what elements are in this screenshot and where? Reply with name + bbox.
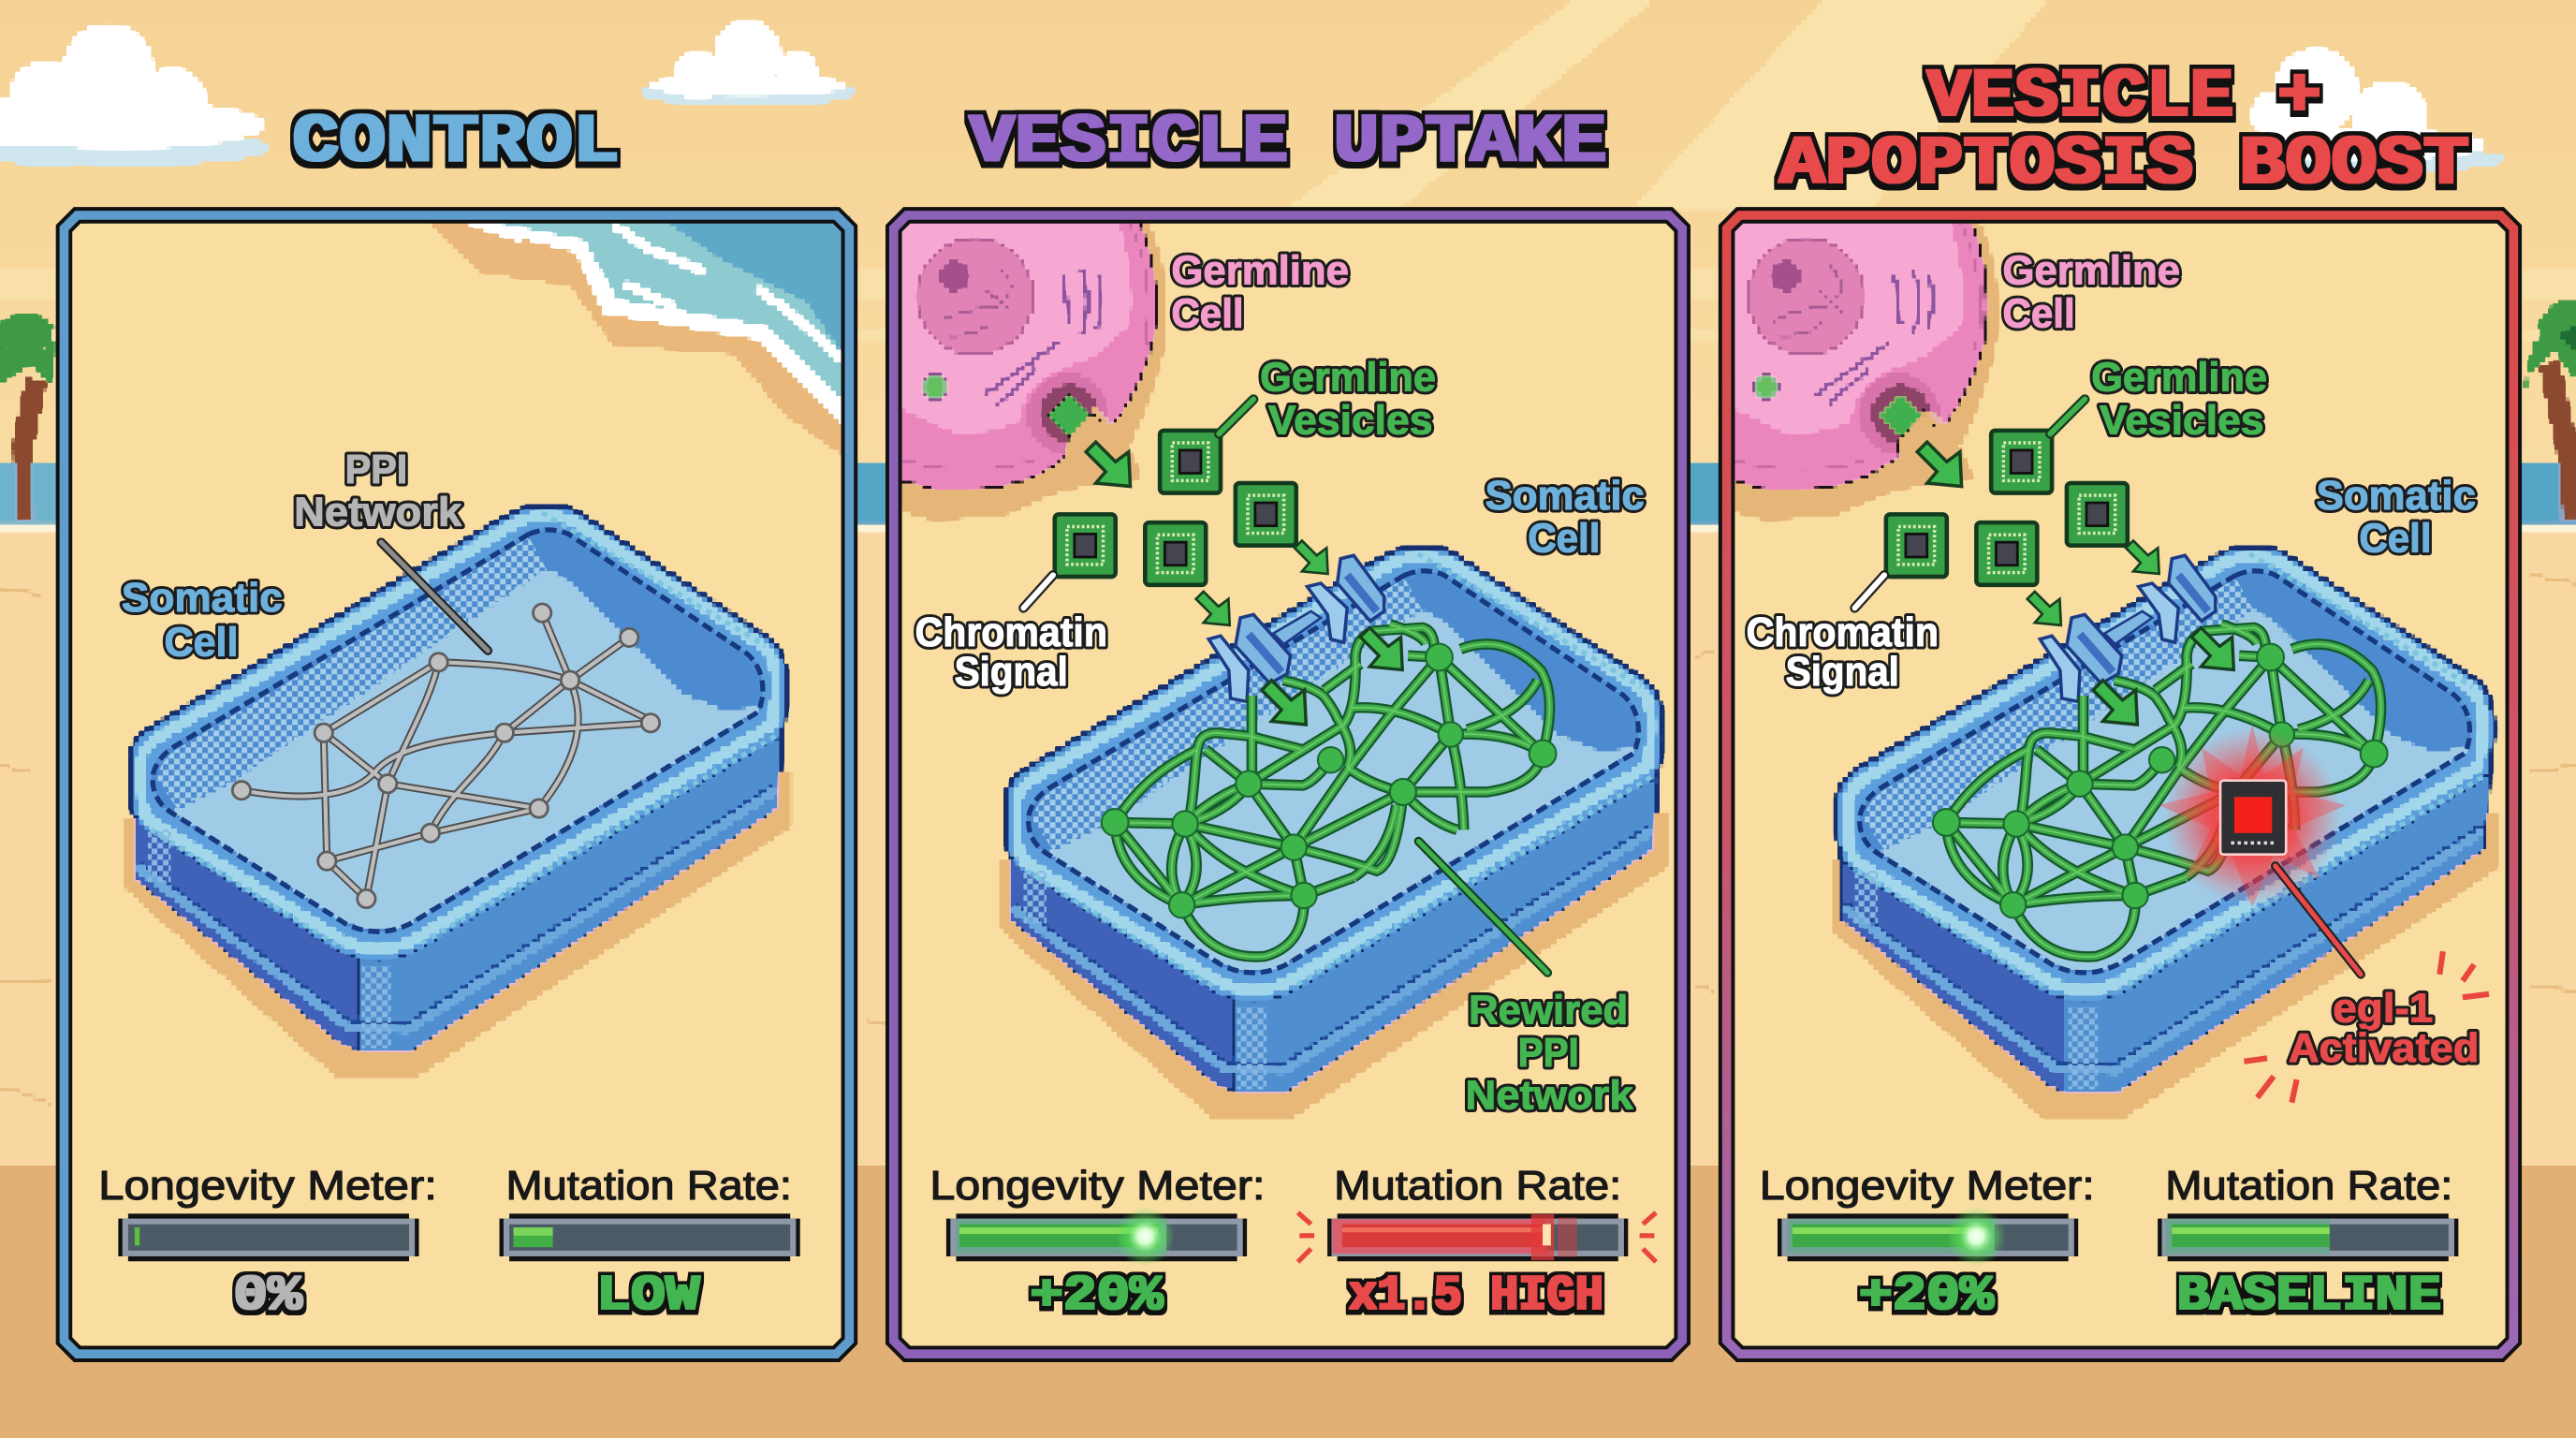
leader line: germline vesicles xyxy=(1219,400,1253,433)
mutation rate meter: Mutation Rate: xyxy=(2165,1163,2452,1209)
label: rewired ppi network: Rewired xyxy=(1469,987,1628,1033)
label: somatic cell: Somatic xyxy=(122,575,283,621)
label: germline cell xyxy=(2002,248,2180,336)
germline cell xyxy=(900,218,1165,520)
panel border xyxy=(894,215,1682,1354)
mutation rate meter xyxy=(1298,1163,1656,1324)
germline cell xyxy=(1732,218,1997,520)
ocean wave corner xyxy=(429,218,848,457)
mutation rate meter xyxy=(2158,1163,2458,1324)
label: germline vesicles xyxy=(2091,355,2267,443)
leader line: rewired network xyxy=(1419,842,1547,973)
label: rewired ppi network: PPI xyxy=(1518,1030,1579,1076)
title: vesicle uptake: VESICLE UPTAKE xyxy=(970,105,1606,183)
panel: vesicle uptake xyxy=(894,215,1682,1354)
label: germline cell xyxy=(1171,248,1349,336)
mutation rate meter: LOW xyxy=(596,1268,700,1324)
label: germline vesicles: Germline xyxy=(1260,355,1436,401)
label: somatic cell xyxy=(122,575,283,665)
label: germline cell: Germline xyxy=(1171,248,1349,294)
panel border xyxy=(64,215,849,1354)
germline vesicle chips xyxy=(1886,431,2128,585)
somatic cell tray xyxy=(126,506,790,1078)
somatic cell tray xyxy=(1003,548,1666,1119)
label: ppi network xyxy=(294,447,462,536)
germline vesicle chips xyxy=(1055,431,1296,585)
longevity meter: +20% xyxy=(1859,1268,1994,1324)
longevity meter: +20% xyxy=(1030,1268,1164,1324)
label: somatic cell: Cell xyxy=(1528,516,1600,562)
somatic cell tray xyxy=(1834,548,2497,1119)
label: ppi network: Network xyxy=(294,490,462,536)
title: vesicle + apoptosis boost xyxy=(1779,59,2469,204)
panel: vesicle + apoptosis boost xyxy=(1727,215,2513,1354)
label: germline cell: Cell xyxy=(2002,290,2075,336)
label: somatic cell: Somatic xyxy=(1486,473,1645,519)
title: vesicle + apoptosis boost: APOPTOSIS BOOST xyxy=(1779,126,2469,204)
rewired ppi network xyxy=(1102,624,1556,957)
label: somatic cell xyxy=(1486,473,1645,562)
label: chromatin signal: Chromatin xyxy=(1747,609,1939,655)
leader line: ppi network xyxy=(381,542,488,651)
receptor gates xyxy=(2040,555,2216,701)
arrows: vesicle uptake path xyxy=(1917,442,2233,725)
mutation rate meter: Mutation Rate: xyxy=(1334,1163,1621,1209)
label: chromatin signal: Chromatin xyxy=(915,609,1107,655)
panel: control xyxy=(64,215,849,1354)
label: egl-1 activated xyxy=(2289,986,2479,1071)
label: egl-1 activated: Activated xyxy=(2289,1025,2479,1071)
label: chromatin signal: Signal xyxy=(955,649,1068,695)
longevity meter: Longevity Meter: xyxy=(1760,1163,2095,1209)
label: rewired ppi network: Network xyxy=(1466,1073,1633,1119)
label: somatic cell xyxy=(2317,473,2476,562)
label: somatic cell: Cell xyxy=(165,619,238,665)
label: egl-1 activated: egl-1 xyxy=(2333,986,2433,1032)
title: vesicle + apoptosis boost: VESICLE + xyxy=(1927,59,2321,137)
longevity meter xyxy=(1760,1163,2095,1324)
longevity meter: Longevity Meter: xyxy=(929,1163,1265,1209)
longevity meter xyxy=(98,1163,437,1324)
label: chromatin signal xyxy=(915,609,1107,695)
label: somatic cell: Cell xyxy=(2359,516,2432,562)
arrows: vesicle uptake path xyxy=(1086,442,1402,725)
egl-1 activated chip with red glow xyxy=(2159,723,2346,907)
label: chromatin signal xyxy=(1747,609,1939,695)
mutation rate meter: Mutation Rate: xyxy=(506,1163,792,1209)
clouds xyxy=(0,22,2502,171)
leader line: germline vesicles xyxy=(2050,400,2085,433)
rewired ppi network xyxy=(1933,624,2388,957)
label: germline cell: Cell xyxy=(1171,290,1244,336)
leader line: egl-1 xyxy=(2276,866,2361,975)
label: somatic cell: Somatic xyxy=(2317,473,2476,519)
label: germline vesicles: Vesicles xyxy=(2100,397,2264,443)
receptor gates xyxy=(1208,555,1384,701)
leader line: chromatin signal xyxy=(1855,575,1884,608)
leader line: chromatin signal xyxy=(1023,575,1053,608)
label: chromatin signal: Signal xyxy=(1786,649,1899,695)
ppi network: grey xyxy=(232,604,660,908)
mutation rate meter xyxy=(500,1163,800,1324)
longevity meter xyxy=(929,1163,1265,1324)
mutation rate meter: BASELINE xyxy=(2177,1268,2441,1324)
label: germline vesicles: Germline xyxy=(2091,355,2267,401)
longevity meter: Longevity Meter: xyxy=(98,1163,437,1209)
label: germline cell: Germline xyxy=(2002,248,2180,294)
title: control: CONTROL xyxy=(292,105,620,183)
label: rewired ppi network xyxy=(1466,987,1633,1119)
label: germline vesicles: Vesicles xyxy=(1268,397,1432,443)
label: ppi network: PPI xyxy=(345,447,407,492)
sparks around egl-1 label xyxy=(2244,951,2489,1103)
panel border xyxy=(1727,215,2513,1354)
longevity meter: 0% xyxy=(233,1268,302,1324)
mutation rate meter: x1.5 HIGH xyxy=(1349,1268,1603,1324)
label: germline vesicles xyxy=(1260,355,1436,443)
